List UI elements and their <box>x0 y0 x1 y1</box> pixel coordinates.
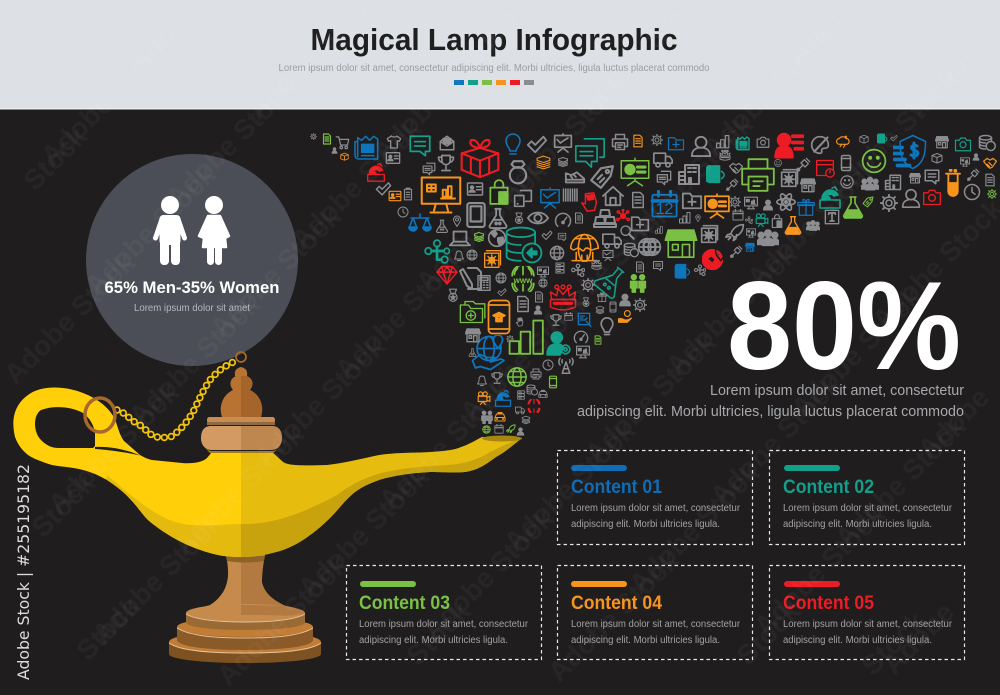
stock watermark pattern: Adobe Stock <box>491 67 634 210</box>
stock watermark pattern: Adobe Stock <box>123 289 266 432</box>
lamp chain <box>117 360 238 438</box>
stock watermark pattern: Stock <box>400 595 477 671</box>
statistic description: Lorem ipsum dolor sit amet, consectetur <box>710 382 964 399</box>
title: Magical Lamp Infographic <box>310 22 678 57</box>
lamp base tiers <box>169 604 321 663</box>
card: content 04: Lorem ipsum dolor sit amet, consectetur <box>571 618 740 630</box>
gender statistic caption: Lorem ipsum dolor sit amet <box>134 303 250 314</box>
stock watermark pattern: Stock <box>17 120 94 196</box>
gender statistic label: 65% Men-35% Women <box>104 278 280 297</box>
gray icons: lower funnel <box>466 292 646 435</box>
card: content 05 <box>770 566 964 660</box>
stock watermark pattern: Adobe Stock <box>160 71 303 214</box>
icon: blue chart board <box>541 188 559 208</box>
icon: green folder <box>460 302 485 322</box>
card: content 01: adipiscing elit. Morbi ultricies ligula. <box>571 518 720 530</box>
icon: red globe with pin <box>703 246 726 269</box>
icon: green flask <box>844 197 862 218</box>
icon: blue gift <box>798 199 814 215</box>
lamp lid <box>201 352 282 453</box>
stock watermark pattern: Adobe Stock <box>204 201 347 344</box>
stock watermark pattern: Adobe Stock <box>741 151 884 294</box>
icon: blue hand with globe <box>472 335 504 370</box>
icon: teal camcorder <box>756 214 768 226</box>
stock watermark pattern: Adobe Stock <box>79 159 222 302</box>
card: content 04: Content 04 <box>571 593 662 614</box>
stock watermark pattern: Adobe Stock <box>0 247 141 390</box>
stock watermark pattern: Adobe Stock <box>454 285 597 428</box>
card: content 04 <box>558 566 752 660</box>
icon: double chat <box>576 139 604 167</box>
icon: orange phone <box>488 300 510 334</box>
card: content 05: Lorem ipsum dolor sit amet, consectetur <box>783 618 952 630</box>
stock watermark pattern: Stock <box>70 590 147 666</box>
stock watermark pattern: Stock <box>730 595 807 671</box>
card: content 01 <box>558 450 752 544</box>
icon: orange flask <box>785 217 801 234</box>
icon: green store <box>665 230 697 257</box>
stock watermark pattern: Adobe Stock <box>410 155 553 298</box>
stock watermark pattern: Adobe Stock <box>417 503 560 646</box>
icon: chat bubble <box>410 136 430 156</box>
stock watermark pattern: Adobe Stock <box>616 109 759 252</box>
stock watermark pattern: Adobe Stock <box>211 549 354 692</box>
icon: red camera <box>924 190 940 204</box>
icon: teal book <box>877 134 887 143</box>
statistic description <box>577 382 964 420</box>
icon: orange presentation <box>705 194 729 218</box>
icon: newspaper <box>355 136 378 159</box>
icon: orange person <box>389 191 401 201</box>
card: content 03 <box>346 566 542 660</box>
icon: orange camcorder <box>478 392 490 404</box>
icon: green presentation board <box>621 158 649 186</box>
icon: green printer <box>742 159 774 191</box>
icon: orange monitor <box>422 178 460 212</box>
card: content 01: Content 01 <box>571 477 662 498</box>
icon: red calendar <box>817 160 834 177</box>
card: content 03: adipiscing elit. Morbi ultricies ligula. <box>359 634 508 646</box>
lamp handle ring <box>85 398 115 432</box>
icon: blue search <box>578 313 591 327</box>
gray icons: upper left tail <box>310 133 643 217</box>
icon: red diamond <box>437 267 457 284</box>
icon: blue calendar <box>652 191 677 218</box>
stock watermark pattern: Adobe Stock <box>535 197 678 340</box>
icon: red hand <box>582 193 596 211</box>
icon: green people <box>630 275 646 292</box>
lamp body <box>13 388 522 557</box>
icon: blue scales <box>409 214 431 231</box>
stock watermark pattern: Adobe Stock <box>498 415 641 558</box>
card: content 02 <box>770 450 964 544</box>
icon: gift box <box>462 140 498 177</box>
stock watermark pattern: Adobe Stock <box>329 243 472 386</box>
stock watermark pattern: Adobe Stock <box>748 499 891 642</box>
icon: teal book with signal <box>707 166 724 182</box>
header band <box>0 0 1000 110</box>
icon: green globe <box>508 368 526 386</box>
stock watermark pattern: Adobe Stock <box>167 419 310 562</box>
icon: orange stack <box>537 156 550 169</box>
stock watermark pattern: Stock <box>25 467 102 543</box>
stock watermark pattern: Adobe <box>877 597 960 680</box>
stock watermark pattern: Adobe <box>902 37 985 120</box>
stock watermark pattern: Adobe Stock <box>542 545 685 688</box>
icon cloud rising from lamp <box>310 133 997 435</box>
stock watermark pattern: Stock <box>855 605 932 681</box>
icon: green bars <box>510 321 543 354</box>
icon: blue online <box>496 390 510 406</box>
colour key bars <box>454 80 534 85</box>
icon: blue folder <box>668 138 684 150</box>
icon: small green document <box>324 134 330 144</box>
stock watermark pattern: Adobe Stock <box>623 457 766 600</box>
stock watermark pattern: Adobe Stock <box>822 63 965 206</box>
stock watermark pattern: Adobe Stock <box>42 377 185 520</box>
gray icons: upper right band <box>652 134 995 192</box>
icon: small orange box <box>341 153 348 160</box>
gray icons: lower right band <box>644 184 980 276</box>
card: content 04: adipiscing elit. Morbi ultricies ligula. <box>571 634 720 646</box>
card: content 01: Lorem ipsum dolor sit amet, consectetur <box>571 502 740 514</box>
icon: blue dollar shield <box>893 136 926 168</box>
icon: small green globe <box>483 426 490 433</box>
icon: teal online <box>820 187 840 208</box>
card: content 02: adipiscing elit. Morbi ultricies ligula. <box>783 518 932 530</box>
icon: blue small store <box>745 243 755 251</box>
stock watermark pattern: Adobe Stock <box>248 331 391 474</box>
icon: orange handshake <box>984 158 996 168</box>
icon: blue translate book <box>675 264 690 278</box>
icon: teal flask <box>593 262 630 299</box>
icon: orange gear <box>485 251 500 267</box>
icon: red network <box>617 209 629 221</box>
stock watermark pattern: Adobe Stock <box>785 281 928 424</box>
icon: orange hand coin <box>619 311 631 322</box>
icon: light bulb <box>506 134 520 154</box>
lamp spout opening <box>482 436 522 442</box>
icon: teal database <box>507 228 541 262</box>
card: content 03: Content 03 <box>359 593 450 614</box>
panel: gender statistic circle <box>86 154 298 366</box>
stock watermark pattern: Adobe <box>912 382 995 465</box>
big statistic 80%: 80% <box>727 257 961 396</box>
icon: man <box>156 196 184 265</box>
icon: green www globe <box>512 265 534 294</box>
stock watermark pattern: Adobe Stock <box>704 369 847 512</box>
lamp stem <box>186 555 300 628</box>
icon: red online <box>368 164 384 181</box>
icon: green phone <box>550 376 556 388</box>
statistic description: adipiscing elit. Morbi ultricies, ligula luctus placerat commodo <box>577 403 964 420</box>
card: content 02: Lorem ipsum dolor sit amet, consectetur <box>783 502 952 514</box>
icon: red person list <box>775 134 803 158</box>
icon: red crown <box>550 285 576 310</box>
stock watermark pattern: Adobe Stock <box>292 461 435 604</box>
icon: teal network <box>425 240 449 263</box>
icon: woman <box>199 196 229 265</box>
icon: red www <box>528 398 540 414</box>
icon: small green rocket <box>506 425 515 433</box>
icon: orange taxi <box>495 412 505 421</box>
stock watermark pattern: Adobe Stock <box>285 113 428 256</box>
stock watermark pattern: Adobe Stock <box>373 373 516 516</box>
icon: teal camera <box>956 138 970 151</box>
stock watermark pattern: Adobe Stock <box>660 239 803 382</box>
icon: green www globe: www <box>513 276 533 285</box>
icon: teal person gear <box>547 332 570 355</box>
icon: green card <box>863 197 873 207</box>
stock watermark pattern: Adobe Stock <box>366 25 509 168</box>
icon: orange globe <box>571 234 598 262</box>
stock watermark pattern: Adobe Stock <box>829 411 972 554</box>
icon: orange cloud <box>837 136 849 147</box>
card: content 02: Content 02 <box>783 477 874 498</box>
lamp <box>0 352 531 663</box>
vertical stock id text: Adobe Stock | #255195182 <box>14 464 33 680</box>
card: content 05: Content 05 <box>783 593 874 614</box>
stock watermark pattern: Adobe Stock <box>697 21 840 164</box>
stock watermark pattern: Adobe Stock <box>86 507 229 650</box>
card: content 05: adipiscing elit. Morbi ultricies ligula. <box>783 634 932 646</box>
card: content 03: Lorem ipsum dolor sit amet, consectetur <box>359 618 528 630</box>
icon: green chef <box>474 232 484 242</box>
stock watermark pattern: Adobe Stock <box>579 327 722 470</box>
icon: orange document <box>634 135 642 147</box>
icon: teal newspaper <box>736 137 749 150</box>
icon: green smile <box>863 150 885 172</box>
gray icons: middle band <box>437 203 655 302</box>
lamp thumb rest gap <box>95 447 140 456</box>
stock watermark pattern: Adobe Stock <box>35 29 178 172</box>
icon: blue calendar: 12 <box>656 201 674 218</box>
subtitle: Lorem ipsum dolor sit amet, consectetur adipiscing elit. Morbi ultricies, ligula luctus placerat commodo <box>278 62 710 74</box>
icon: small green doc <box>595 336 601 344</box>
icon: orange test tube <box>946 169 960 196</box>
icon: green virus <box>987 189 997 199</box>
icon: green bag <box>490 180 508 204</box>
